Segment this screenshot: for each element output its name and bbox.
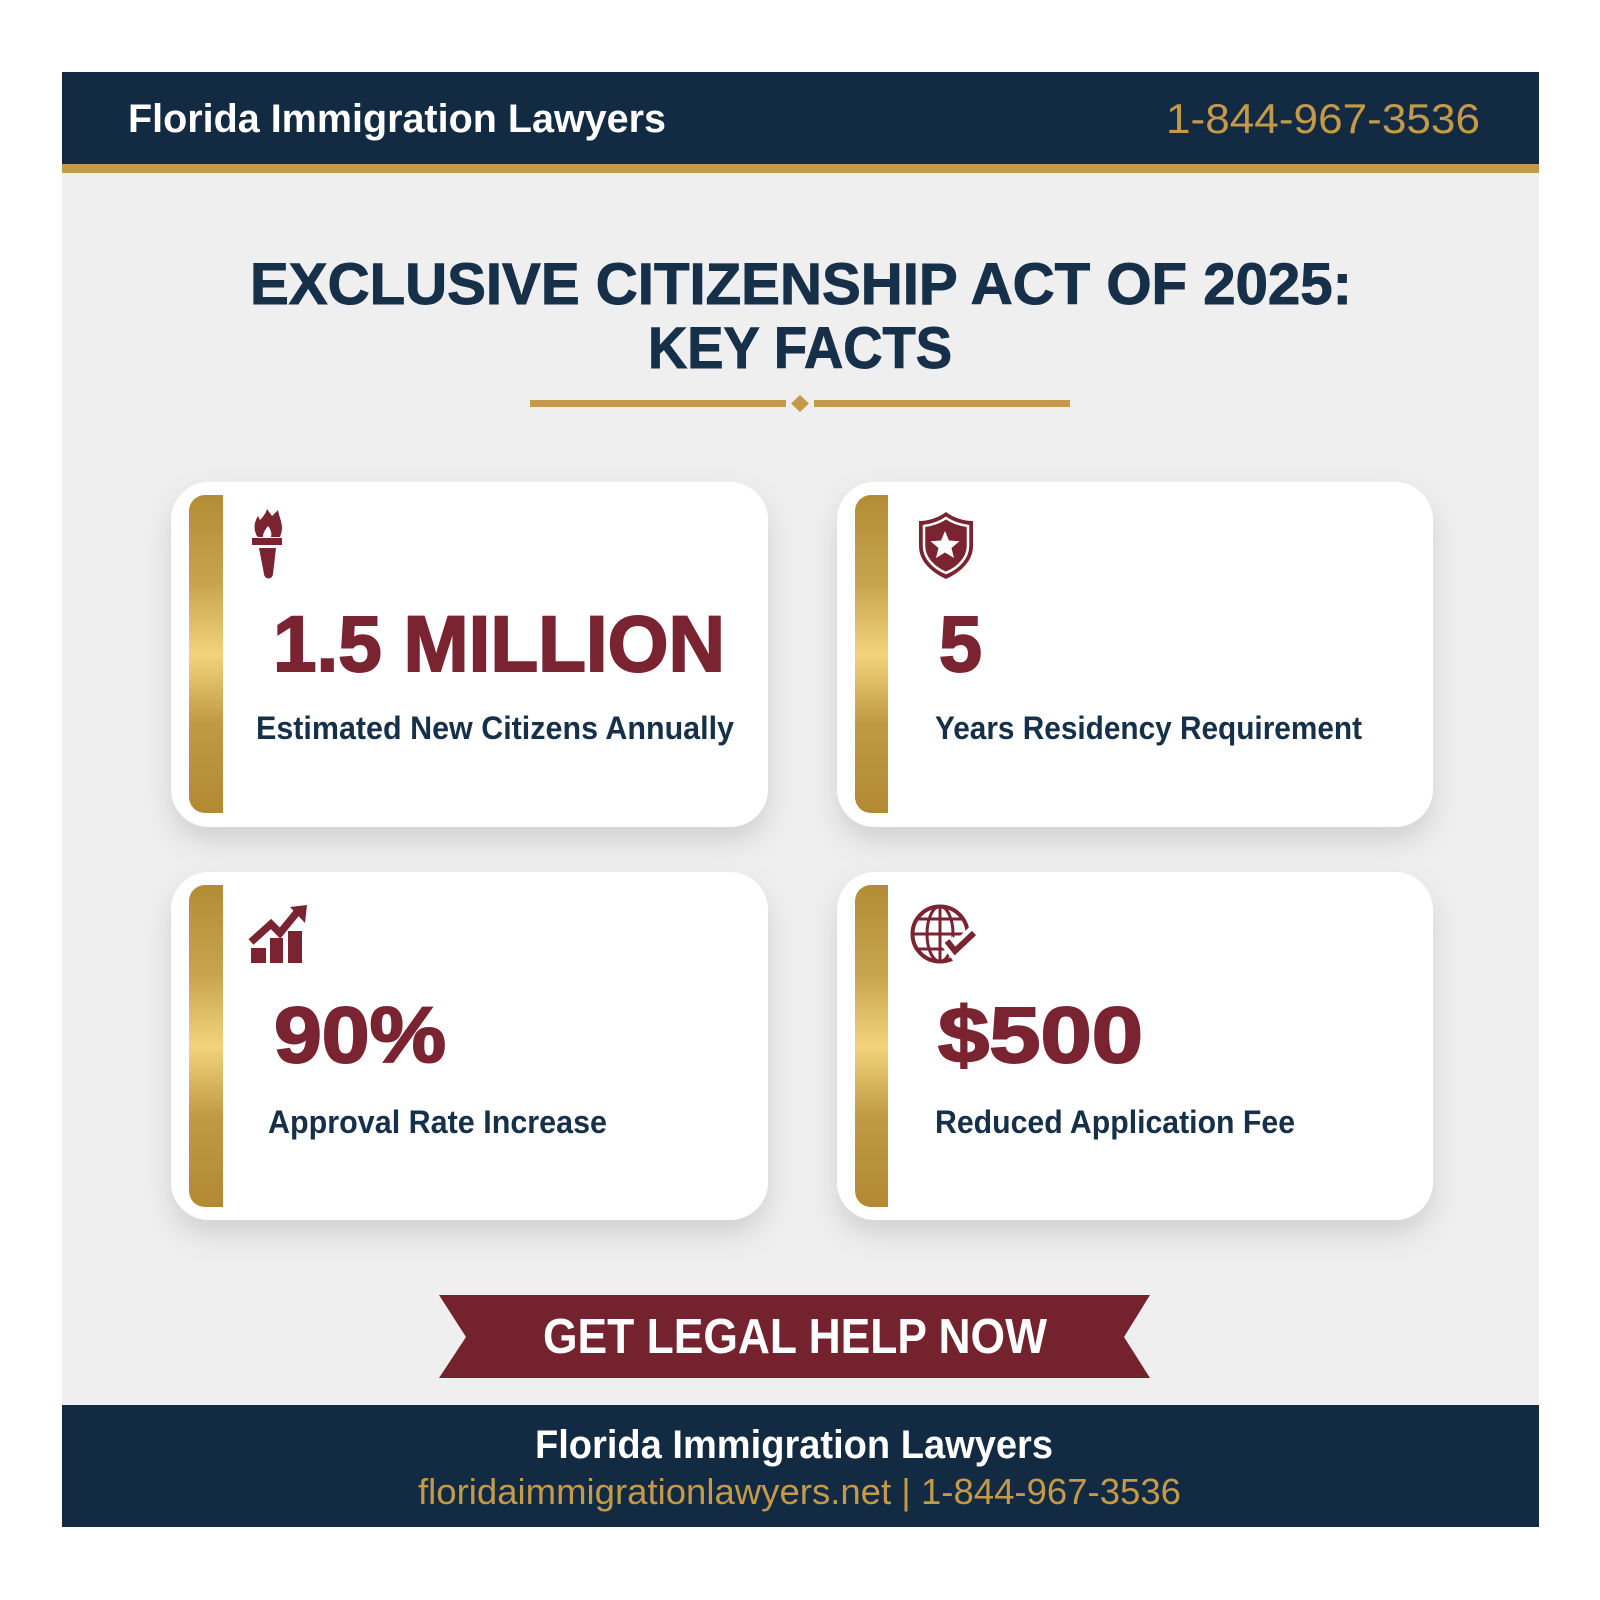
title: EXCLUSIVE CITIZENSHIP ACT OF 2025: bbox=[250, 252, 1352, 317]
title divider with diamond bbox=[530, 395, 1070, 412]
stat: 90%: 90% bbox=[274, 990, 446, 1079]
stat: $500: $500 bbox=[938, 990, 1143, 1079]
footer firm name: Florida Immigration Lawyers bbox=[535, 1423, 1053, 1467]
stat label: Years Residency Requirement bbox=[935, 710, 1362, 746]
stat label: Estimated New Citizens Annually bbox=[256, 710, 734, 746]
stat label: Reduced Application Fee bbox=[935, 1104, 1295, 1140]
icon: torch bbox=[252, 509, 282, 578]
call to action ribbon: GET LEGAL HELP NOW bbox=[543, 1310, 1048, 1364]
panel: approval rate card bbox=[171, 872, 768, 1220]
header bar bbox=[62, 72, 1539, 173]
icon: rising bar chart bbox=[251, 905, 307, 963]
header phone number: 1-844-967-3536 bbox=[1166, 95, 1480, 142]
stat: 5: 5 bbox=[939, 599, 982, 688]
title bbox=[250, 252, 1352, 381]
stat: 1.5 million: 1.5 MILLION bbox=[273, 599, 725, 688]
header firm name: Florida Immigration Lawyers bbox=[128, 97, 666, 141]
icon: shield with star bbox=[919, 512, 973, 579]
icon: globe with check bbox=[912, 906, 974, 962]
footer website and phone: floridaimmigrationlawyers.net | 1-844-967-3536 bbox=[418, 1471, 1181, 1512]
panel: new citizens card bbox=[171, 482, 768, 827]
stat label: Approval Rate Increase bbox=[268, 1104, 607, 1140]
panel: application fee card bbox=[837, 872, 1433, 1220]
footer bar bbox=[62, 1405, 1539, 1527]
call to action ribbon bbox=[439, 1295, 1150, 1378]
panel: residency card bbox=[837, 482, 1433, 827]
title: KEY FACTS bbox=[648, 316, 952, 381]
